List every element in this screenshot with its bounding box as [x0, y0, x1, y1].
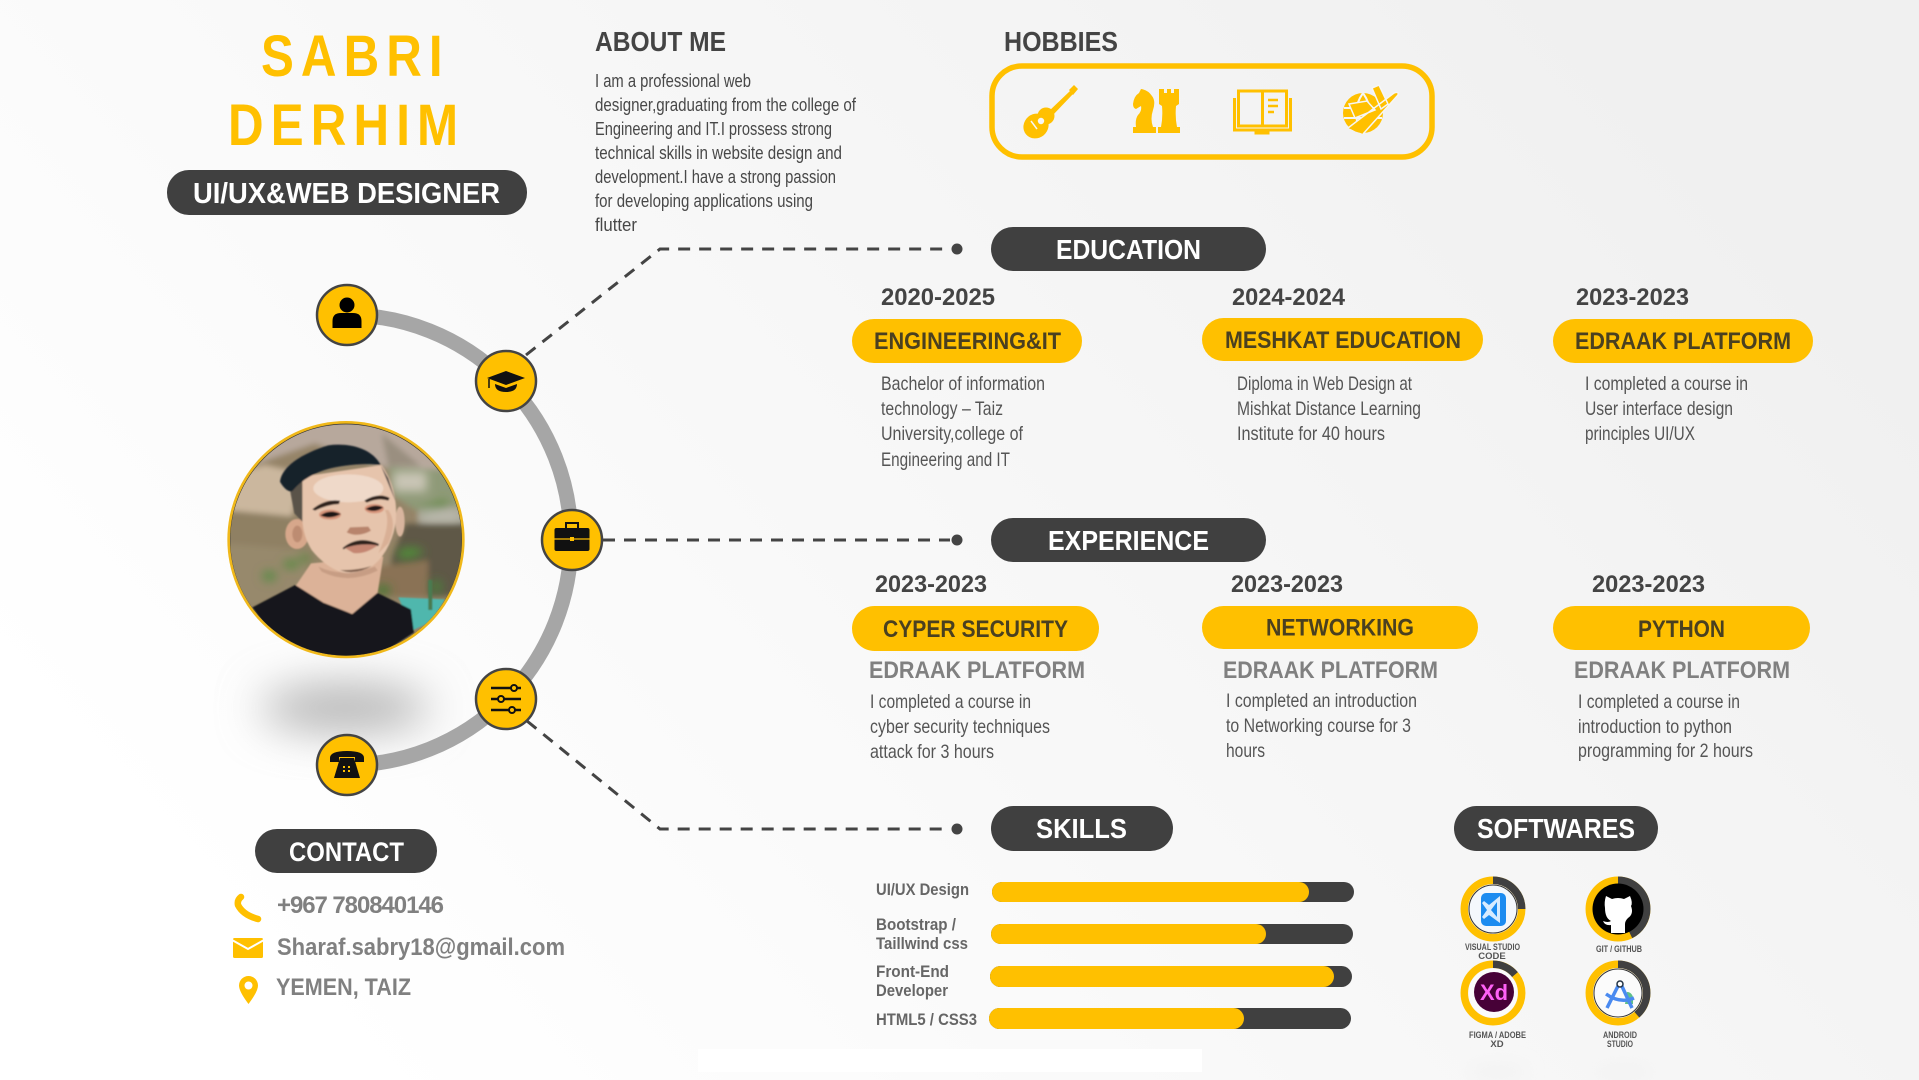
name title: SABRI [261, 24, 450, 89]
photo shadow [260, 684, 430, 732]
education item: engineering: Bachelor of information [881, 373, 1045, 395]
education item: meshkat: MESHKAT EDUCATION [1225, 327, 1461, 354]
education item: engineering: University,college of [881, 423, 1023, 445]
contact heading pill [255, 829, 437, 873]
education item: meshkat: Mishkat Distance Learning [1237, 398, 1421, 420]
experience item: networking: 2023-2023 [1231, 571, 1343, 598]
skills heading pill [991, 806, 1173, 851]
education item: edraak: User interface design [1585, 398, 1733, 420]
skill bar: UI/UX design: UI/UX Design [876, 881, 969, 899]
software: visual studio code [1464, 880, 1522, 962]
software: figma adobe xd: Xd [1480, 980, 1508, 1005]
experience item: cyber security: cyber security techniques [870, 716, 1050, 738]
education item: meshkat [1202, 284, 1483, 445]
panel: education [852, 227, 1813, 471]
job title pill: UI/UX&WEB DESIGNER [193, 178, 500, 210]
software: github [1589, 880, 1647, 955]
email address: Sharaf.sabry18@gmail.com [277, 934, 565, 961]
softwares heading pill: SOFTWARES [1477, 813, 1635, 844]
panel: experience [852, 518, 1810, 763]
experience item: networking: hours [1226, 740, 1265, 762]
experience item: networking: NETWORKING [1266, 614, 1414, 642]
experience item: cyber security: CYPER SECURITY [883, 616, 1068, 643]
timeline arc [347, 315, 571, 765]
experience item: networking: to Networking course for 3 [1226, 715, 1411, 737]
skill bar: UI/UX design [876, 881, 1354, 902]
education item: meshkat: 2024-2024 [1232, 284, 1346, 311]
experience item: cyber security: I completed a course in [870, 691, 1031, 713]
education item: meshkat: Institute for 40 hours [1237, 423, 1385, 445]
about heading: ABOUT ME [595, 26, 726, 57]
panel: softwares [1454, 806, 1658, 1050]
about text: Engineering and IT.I prossess strong [595, 119, 832, 139]
portrait photo [225, 420, 468, 660]
education heading pill: EDUCATION [1056, 234, 1201, 265]
icon: phone [238, 897, 258, 919]
icon: experience node [542, 510, 602, 570]
experience item: networking: I completed an introduction [1226, 690, 1417, 712]
skill bar: bootstrap: Taillwind css [876, 935, 968, 953]
icon: guitar [1018, 85, 1078, 144]
skill bar: bootstrap: Bootstrap / [876, 916, 956, 934]
skills heading pill: SKILLS [1036, 813, 1127, 844]
about text [595, 71, 857, 235]
about text: technical skills in website design and [595, 143, 842, 163]
dashed connector: skills [527, 721, 962, 834]
icon: person node [317, 285, 377, 345]
about text: I am a professional web [595, 71, 751, 91]
software: android studio: ANDROID [1603, 1030, 1637, 1041]
experience item: python: PYTHON [1638, 616, 1725, 643]
education item: edraak: EDRAAK PLATFORM [1575, 328, 1791, 355]
skill bar: bootstrap [876, 916, 1353, 953]
icon: open book [1234, 91, 1290, 133]
location: YEMEN, TAIZ [276, 974, 411, 1001]
education item: edraak [1553, 284, 1813, 445]
experience item: python: programming for 2 hours [1578, 740, 1753, 762]
experience item: python [1553, 571, 1810, 762]
experience item: networking [1202, 571, 1478, 762]
panel: about me [595, 26, 857, 235]
skill bar: html css [876, 1008, 1351, 1029]
education item: engineering [852, 284, 1082, 471]
icon: contact node [317, 735, 377, 795]
software: visual studio code: CODE [1478, 951, 1506, 962]
education item: engineering: 2020-2025 [881, 284, 995, 311]
skill bar: front-end: Developer [876, 982, 949, 1000]
skill bar: front-end [876, 963, 1352, 1000]
experience item: python: EDRAAK PLATFORM [1574, 657, 1790, 684]
experience item: cyber security [852, 571, 1099, 763]
software: figma adobe xd [1464, 964, 1526, 1050]
about text: designer,graduating from the college of [595, 95, 857, 115]
panel: contact [232, 829, 565, 1004]
experience item: cyber security: 2023-2023 [875, 571, 987, 598]
icon: globe and plane [1343, 85, 1398, 134]
hobbies frame [992, 66, 1432, 157]
hobbies heading: HOBBIES [1004, 26, 1118, 57]
education item: edraak: 2023-2023 [1576, 284, 1689, 311]
panel: skills [876, 806, 1354, 1029]
software: visual studio code: VISUAL STUDIO [1465, 942, 1520, 953]
experience item: python: introduction to python [1578, 716, 1732, 738]
icon: skills node [476, 669, 536, 729]
phone number: +967 780840146 [277, 892, 444, 919]
education item: engineering: ENGINEERING&IT [874, 328, 1061, 355]
skill bar: html css: HTML5 / CSS3 [876, 1011, 977, 1029]
experience heading pill [991, 518, 1266, 562]
job title pill [167, 170, 527, 215]
contact heading pill: CONTACT [289, 837, 404, 867]
software: github: GIT / GITHUB [1596, 944, 1642, 955]
icon: location pin [239, 976, 258, 1004]
software: figma adobe xd: XD [1490, 1039, 1504, 1050]
experience item: cyber security: attack for 3 hours [870, 741, 994, 763]
name title: DERHIM [228, 93, 465, 158]
education item: engineering: technology – Taiz [881, 398, 1003, 420]
about text: for developing applications using [595, 191, 813, 211]
experience item: cyber security: EDRAAK PLATFORM [869, 657, 1085, 684]
education item: meshkat: Diploma in Web Design at [1237, 373, 1412, 395]
experience item: python: I completed a course in [1578, 691, 1740, 713]
software: android studio [1589, 964, 1647, 1050]
dashed connector: education [526, 244, 962, 355]
software: android studio: STUDIO [1607, 1039, 1633, 1050]
panel: hobbies [992, 26, 1432, 157]
softwares heading pill [1454, 806, 1658, 851]
experience item: networking: EDRAAK PLATFORM [1223, 657, 1438, 684]
education item: engineering: Engineering and IT [881, 449, 1010, 471]
name title [228, 24, 465, 158]
icon: education node [476, 351, 536, 411]
icon: mail [232, 938, 264, 958]
education heading pill [991, 227, 1266, 271]
experience heading pill: EXPERIENCE [1048, 525, 1209, 556]
education item: edraak: principles UI/UX [1585, 423, 1695, 445]
dashed connector: experience [603, 534, 962, 546]
experience item: python: 2023-2023 [1592, 571, 1705, 598]
education item: edraak: I completed a course in [1585, 373, 1748, 395]
skill bar: front-end: Front-End [876, 963, 949, 981]
about text: flutter [595, 215, 637, 235]
icon: chess pieces [1133, 89, 1180, 133]
about text: development.I have a strong passion [595, 167, 836, 187]
software: figma adobe xd: FIGMA / ADOBE [1469, 1030, 1526, 1041]
